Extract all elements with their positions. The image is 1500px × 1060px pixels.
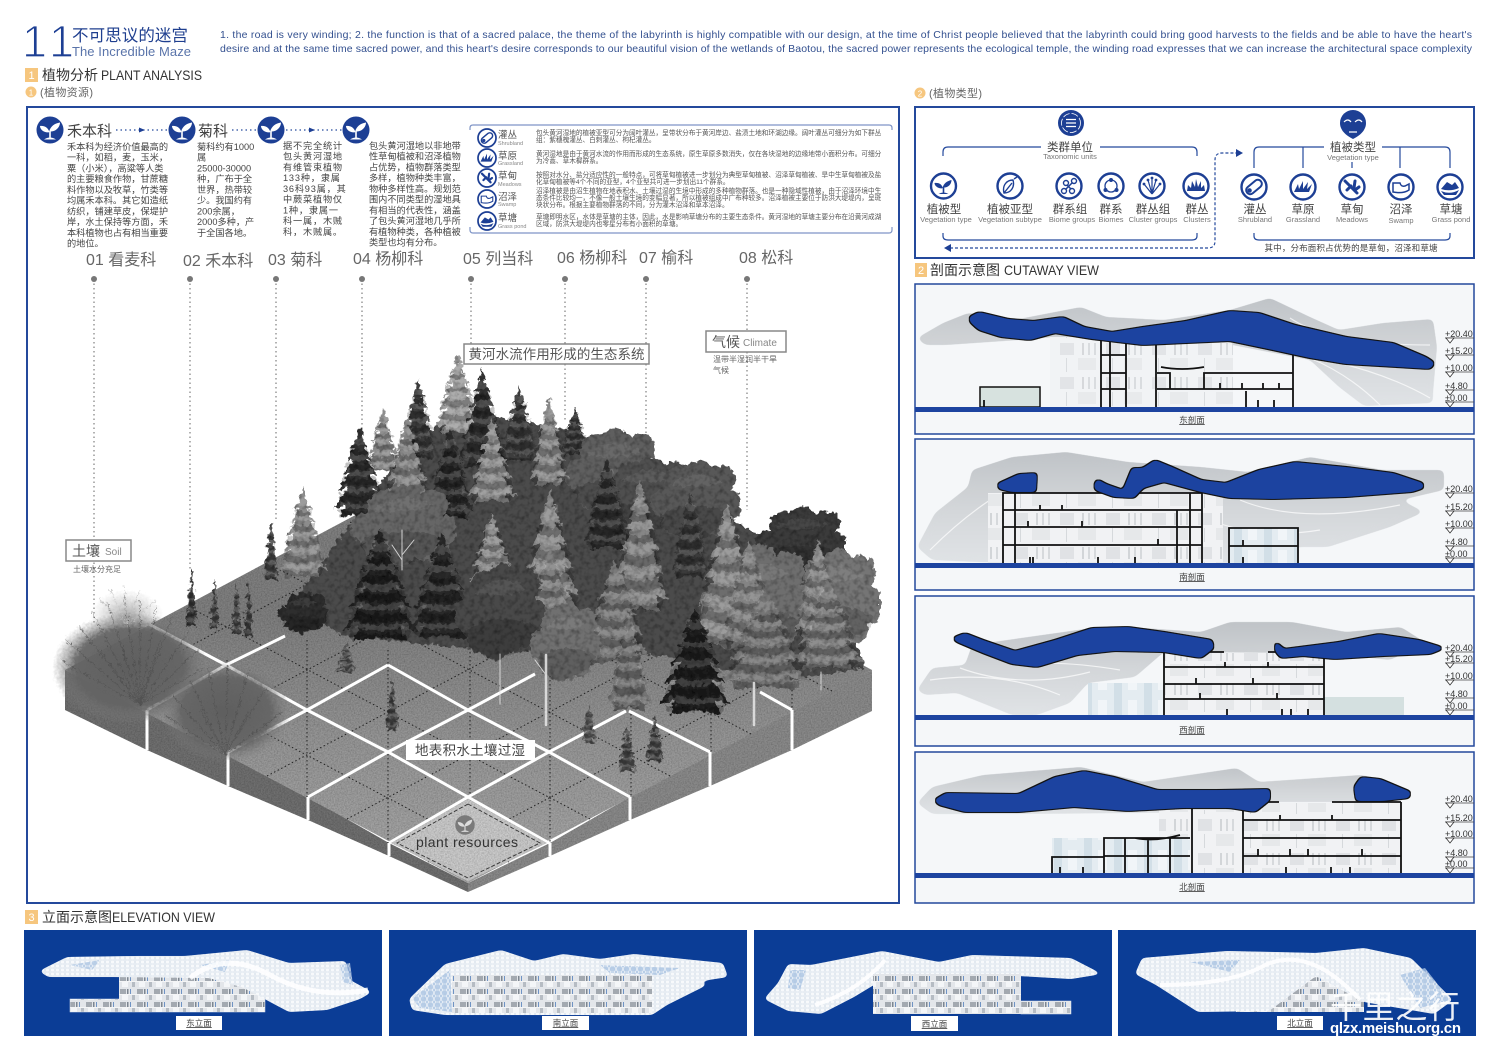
text: wetland vegetation description: 有相当的代表性，涵盖 [369,204,461,215]
shell folds [930,663,1120,695]
type icons [1242,174,1462,200]
canopy patch [412,965,680,1012]
text: wetland vegetation description: 类型也均有分布。 [369,237,442,248]
family flow headings [36,116,370,144]
text: wetland vegetation description: 物种多样性高。规划范 [369,183,461,194]
broadleaf canopy [349,397,884,658]
highlighted tile [391,799,547,881]
text: grass pond: 区域，防洪大堤堤内也零星分布有小面积的草塘。 [536,219,682,228]
text: grass family description: 一科，如稻，麦，玉米， [67,152,168,163]
low podium [70,999,265,1012]
section structure [1052,802,1401,873]
text: wetland vegetation description: 占优势，植物群落类型 [369,161,461,172]
white birch trunks [392,530,821,725]
blue roof ribbon main [934,771,1270,812]
callout: climate: Climate [743,338,777,349]
facade [1163,653,1324,715]
section structure [1003,493,1298,563]
facade [119,977,265,1012]
text: grass family description: 粟（小米），高粱等人类 [67,162,163,173]
level markers: ±0.00 [1445,859,1467,869]
plant resources tile label: plant resources [416,834,518,850]
heading: taxonomic units: 类群单位 [1047,140,1093,154]
text: wetland vegetation description: 了包头黄河湿地几乎所 [369,215,461,226]
left soil face [65,670,468,892]
text: wetland vegetation description: 有植物种类，各种植被 [369,226,461,237]
units labels: Vegetation subtype [978,215,1042,224]
heading: grass family: 禾本科 [67,123,112,140]
sub heading: vegetation types: (植物类型) [929,86,982,100]
text: swamp: 块状分布。根据主要植物群落的不同，分为灌木沼泽和草本沼泽。 [536,200,729,209]
saplings [186,568,665,772]
shell folds [1290,318,1430,405]
units icons [931,174,1208,198]
text: grassland: 黄河湿地是由于黄河水流的作用而形成的生态系统，原生草原多数消失，仅在各块湿地的边缘地带小面积分布。可细分 [536,149,882,158]
sub heading: plant resources [26,85,93,99]
text: meadows: 按照对水分、盐分适应性的一般特点，可将草甸植被进一步划分为典型草甸植被、沼泽草甸植被、旱中生草甸植被及盐 [536,170,882,179]
translucent shell [917,452,1444,563]
units labels: 植被型 [927,202,961,216]
note: 其中，分布面积占优势的是草甸，沼泽和草塘 [1264,243,1438,253]
facade [452,975,652,1013]
facade [873,974,1021,1014]
level markers: +20.40 [1445,484,1473,494]
mesh canopy [764,951,1102,1014]
ground band [915,873,1474,878]
text: aster family description: 2000多种，产 [197,216,254,227]
section heading: cutaway view: 剖面示意图 CUTAWAY VIEW [930,262,1100,278]
top bracket with drops [1254,147,1450,168]
section heading: cutaway view: 2 [918,265,924,277]
level markers: +20.40 [1445,643,1473,653]
level markers: +4.80 [1445,848,1468,858]
text: swamp: 态条件比较均一，不像一般土壤生境的变幅显著，所以植被组成中广布种较多。沼泽植被主要位于防洪大堤堤内，呈斑 [536,193,882,202]
panel: east section [915,284,1474,434]
plant family labels [86,249,793,270]
text: vascular plant statistics: 133种，隶属 [283,172,341,183]
ground band [915,715,1474,720]
white tile lines [145,622,792,856]
level markers [1445,329,1474,407]
title block [22,16,191,67]
ornamental grasses [52,586,290,762]
right annex [1324,697,1404,715]
grass blades [60,596,282,755]
blue roof ribbon right [1354,777,1411,801]
translucent shell [917,298,1437,406]
text: swamp: 沼泽植被是由沼生植物在地表积水、土壤过湿的生境中形成的多种植物群落。也是一种隐域性植被，由于沼泽环境中生 [536,186,882,195]
label: grassland: 草原 [498,150,517,162]
caption: 北立面 [1287,1018,1313,1028]
callout: surface water: 地表积水土壤过湿 [415,742,525,758]
panel: north section [915,752,1474,903]
text: grass family description: 料作物以及牧草，竹类等 [67,184,168,195]
taxonomic units group [920,110,1211,240]
text: grass family description: 本科植物也占有相当重要 [67,227,168,238]
legend: vegetation subtypes: Meadows [498,182,522,188]
dashed connector arrow [944,149,1243,252]
text: grass family description: 岸，水土保持等方面，禾 [67,216,168,227]
caption [911,1016,958,1031]
sub heading: vegetation types: 2 [918,90,923,98]
icon: sprout 2 [168,116,196,144]
units labels: Biomes [1098,215,1124,224]
panel: plant resources [27,107,899,903]
section structure [984,338,1293,407]
callout: climate: 气候 [712,334,740,350]
plant family labels: 07 榆科 [639,249,693,267]
text: grass family description: 禾本科为经济价值最高的 [67,141,168,152]
text: vascular plant statistics: 据不完全统计 [283,140,343,151]
blue roof ribbon left [997,473,1037,492]
text: grass family description: 的主要粮食作物，甘蔗糖 [67,173,168,184]
annex [980,387,1040,407]
text: grass family description: 的地位。 [67,238,104,249]
icon: grass pond [478,212,496,230]
level markers: ±0.00 [1445,549,1467,559]
forest mass [295,410,865,685]
plant family labels: 01 看麦科 [86,251,156,269]
blue roof ribbon main [1094,460,1424,499]
callout: yellow river ecosystem: 黄河水流作用形成的生态系统 [468,347,644,362]
type labels: Grassland [1286,215,1320,224]
type labels: Meadows [1336,215,1368,224]
lower bracket [943,233,1197,240]
text: vascular plant statistics: 中蕨菜植物仅 [283,194,343,205]
dashed tile outline [397,804,540,878]
text: grass family description: 均属禾本科。其它如造纸 [67,195,168,206]
type labels: Shrubland [1238,215,1272,224]
ground band [915,563,1474,568]
text: vascular plant statistics: 1种，隶属一 [283,204,339,215]
icon: sprout 1 [36,116,64,144]
front grass clump [162,662,290,762]
shell folds [930,500,1400,550]
icon: taxonomic list [1058,110,1084,136]
canopy ridge [1160,960,1360,1000]
facade [988,493,1223,563]
panel: east elevation [24,930,382,1036]
callout: soil [66,540,131,574]
text: wetland vegetation description: 性草甸植被和沼泽植物 [369,151,461,162]
level markers: +15.20 [1445,502,1473,512]
mesh canopy [39,950,372,1012]
text: aster family description: 于全国各地。 [197,227,252,238]
type labels: 草甸 [1340,203,1364,216]
facade centre [1159,810,1244,873]
plant family labels: 08 松科 [739,249,793,267]
panel: south section [915,439,1474,590]
type labels: 草原 [1292,203,1314,216]
icon: shrubland [478,129,496,147]
heading english: Taxonomic units [1043,152,1097,161]
arrow 2 [232,129,256,131]
level markers: ±0.00 [1445,701,1467,711]
canopy patch [1190,960,1450,1008]
icon: sprout 4 [342,116,370,144]
caption: 西立面 [922,1019,948,1029]
text: aster family description: 少。我国约有 [197,195,252,206]
mid row conifers [263,480,864,690]
tree cluster [186,354,884,772]
right glazed volume [1229,528,1298,563]
level markers [1445,484,1474,563]
left low glazed volume [1052,838,1190,873]
icon: sprout 3 [258,116,284,144]
units labels: 群系 [1100,202,1122,216]
back pale grass [91,590,163,642]
intro paragraph: desire and at the same time sacred power, and this heart's desire corresponds to our beautiful vision of the wetlands of Baotou, the sacred power represents the ecological temple, the winding road expresses that we can increase the architectural space complexity [220,43,1473,55]
canopy ridge [190,963,368,993]
panel: south elevation [389,930,747,1036]
facade right [1244,803,1401,873]
intro paragraph: 1. the road is very winding; 2. the function is that of a sacred palace, the theme of the labyrinth is highly compatible with our design, at the time of Christ people believed that the labyrinth could bring good harvests to the fields and be able to have the heart's [220,29,1472,41]
low podium [1021,1001,1071,1014]
text: aster family description: 菊科约有1000 [197,141,254,152]
text: wetland vegetation description: 包头黄河湿地以非地带 [369,140,461,151]
text: vascular plant statistics: 科，木贼属。 [283,226,343,237]
level markers: +4.80 [1445,689,1468,699]
level markers: +4.80 [1445,537,1468,547]
mesh canopy [409,950,728,1015]
sub heading: plant resources: (植物资源) [40,85,93,99]
legend: vegetation subtypes: Grass pond [498,224,526,230]
callout: climate: 气候 [713,365,729,375]
facade [1050,337,1233,407]
caption [542,1016,589,1030]
canopy patch [70,960,353,985]
canopy patch [788,970,806,990]
caption: 东立面 [186,1018,212,1028]
text: shrubland: 组：紫穗槐灌丛、白刺灌丛、枸杞灌丛。 [536,135,656,144]
text: vascular plant statistics: 科一属，木贼 [283,215,343,226]
back row conifers [333,354,589,519]
section heading: plant analysis: 1 [28,70,35,82]
dotted grid [105,478,832,880]
section heading: plant analysis: 植物分析PLANT ANALYSIS [42,67,202,83]
text: aster family description: 200余属， [197,205,240,216]
sub heading: plant resources: 1 [29,88,34,98]
units labels: Clusters [1183,215,1211,224]
lower bracket [1254,233,1450,240]
level markers: +10.00 [1445,671,1473,681]
callout: climate [706,331,786,375]
text: grassland: 为冷蒿、草木樨群系。 [536,156,602,165]
caption: 西剖面 [1179,725,1205,735]
level markers: +15.20 [1445,813,1473,823]
isometric ground block [65,455,872,892]
sub heading: vegetation types [914,86,982,100]
level markers: +15.20 [1445,654,1473,664]
callout: soil: Soil [105,547,122,558]
main grass clump [52,612,208,724]
ground band [915,407,1474,412]
text: vascular plant statistics: 包头黄河湿地 [283,151,343,162]
vegetation type group [1238,110,1470,253]
caption: 南立面 [553,1018,579,1028]
level markers [1445,794,1474,873]
units labels: Biome groups [1049,215,1095,224]
dark foreground conifers [278,529,731,714]
level markers: +20.40 [1445,794,1473,804]
units labels: 群丛组 [1136,202,1171,216]
level markers: +4.80 [1445,381,1468,391]
translucent shell [917,767,1410,814]
text: grass pond: 草塘即明水区，水体是草塘的主体，因此，水是影响草塘分布的主要生态条件。黄河湿地的草塘主要分布在沿黄河成湖 [536,212,882,221]
chinese title: 不可思议的迷宫 [72,26,188,45]
heading: aster family: 菊科 [198,123,228,140]
english title: The Incredible Maze [72,44,191,59]
type labels [1238,202,1470,225]
project number: 11 [22,16,74,67]
text: vascular plant statistics: 36科93属，其 [283,183,347,194]
label: shrubland: 灌丛 [498,129,518,141]
blue roof ribbon right [1275,634,1445,659]
blue roof ribbon left [952,627,1214,667]
units labels: 群丛 [1186,202,1208,216]
callout: climate: 温带半湿润半干旱 [713,354,777,364]
callout: soil: 土壤 [72,543,100,559]
type labels: 草塘 [1440,202,1462,216]
panel: west elevation [754,930,1112,1036]
legend: vegetation subtypes: Shrubland [498,141,523,147]
translucent shell [917,622,1426,715]
units labels: 群系组 [1053,202,1088,216]
plant resources tile label [416,815,518,850]
section heading: elevation view: 3 [28,912,35,924]
watermark: 千里之行 [1330,989,1460,1025]
leader lines with dots [91,276,750,625]
panel: west section [915,596,1474,746]
icon: face mask [1340,110,1366,139]
arrowheads [139,128,315,132]
text: aster family description: 种，广布于全 [197,173,252,184]
caption: 北剖面 [1179,882,1205,892]
type labels: Grass pond [1432,215,1470,224]
type labels: 灌丛 [1244,203,1266,216]
level markers: +20.40 [1445,329,1473,339]
units labels: Cluster groups [1129,215,1178,224]
plant family labels: 06 杨柳科 [557,249,627,267]
type labels: Swamp [1388,216,1414,225]
panel: vegetation types [915,107,1474,258]
units labels: 植被亚型 [987,202,1033,216]
ground surface [65,455,872,883]
callout: surface water [406,740,535,760]
level markers: +10.00 [1445,363,1473,373]
top bracket [943,147,1197,156]
text: aster family description: 25000-30000 [197,163,251,173]
level markers: +15.20 [1445,346,1473,356]
type labels: 沼泽 [1390,202,1412,216]
caption [1277,1016,1323,1030]
text: aster family description: 属 [197,153,206,163]
arrow 1 [116,129,168,131]
left glazed volume [1088,683,1163,715]
section heading: elevation view: 立面示意图ELEVATION VIEW [42,909,216,925]
text: shrubland: 包头黄河湿地的植被亚型可分为阔叶灌丛，呈带状分布于黄河岸边、盐渍土地和环湖边缘。阔叶灌丛可细分为如下群丛 [536,128,882,137]
plant family labels: 03 菊科 [268,251,322,269]
blue roof ribbon [969,311,1435,369]
text: wetland vegetation description: 多样，植物种类丰富， [369,172,461,183]
legend: vegetation subtypes: Grassland [498,161,523,167]
caption: 东剖面 [1179,415,1205,425]
pale blades [98,586,156,625]
icon: grassland [478,149,496,167]
text: meadows: 化草甸植被等4个不同的亚型，4个亚型共可进一步划出11个群系。 [536,177,730,186]
legend: vegetation subtypes [470,125,892,233]
level markers [1445,643,1474,715]
caption: 南剖面 [1179,572,1205,582]
mesh canopy [1135,948,1453,1014]
plant family labels: 02 禾本科 [183,252,253,270]
text: aster family description: 世界，热带较 [197,184,252,195]
right soil face [468,670,872,892]
label: swamp: 沼泽 [498,192,518,203]
canopy ridge [815,960,885,1005]
facade [1236,976,1364,1012]
heading: vegetation type: 植被类型 [1330,140,1376,154]
units labels: Vegetation type [920,215,972,224]
callout: soil: 土壤水分充足 [73,564,121,574]
level markers: ±0.00 [1445,393,1467,403]
level markers: +10.00 [1445,829,1473,839]
label: grass pond: 草塘 [498,212,518,224]
icon: sprout [455,815,475,835]
caption [176,1016,222,1030]
arrow 3 [286,129,342,131]
plant family labels: 04 杨柳科 [353,250,423,268]
icon: swamp [478,190,496,208]
text: grass family description: 纺织，铺建草皮，保堤护 [67,205,168,216]
units labels [920,202,1211,224]
icon: meadows [478,169,496,187]
level markers: +10.00 [1445,519,1473,529]
panel: north elevation [1118,930,1476,1036]
text: vascular plant statistics: 有维管束植物 [283,161,343,172]
watermark: qlzx.meishu.org.cn [1330,1020,1461,1037]
text: wetland vegetation description: 围内不同类型的湿地具 [369,194,461,205]
intro paragraph [220,29,1473,55]
section structure [1164,652,1324,715]
legend: vegetation subtypes: Swamp [498,202,516,208]
label: meadows: 草甸 [498,170,517,182]
heading english: Vegetation type [1327,153,1379,162]
plant family labels: 05 列当科 [463,250,533,268]
